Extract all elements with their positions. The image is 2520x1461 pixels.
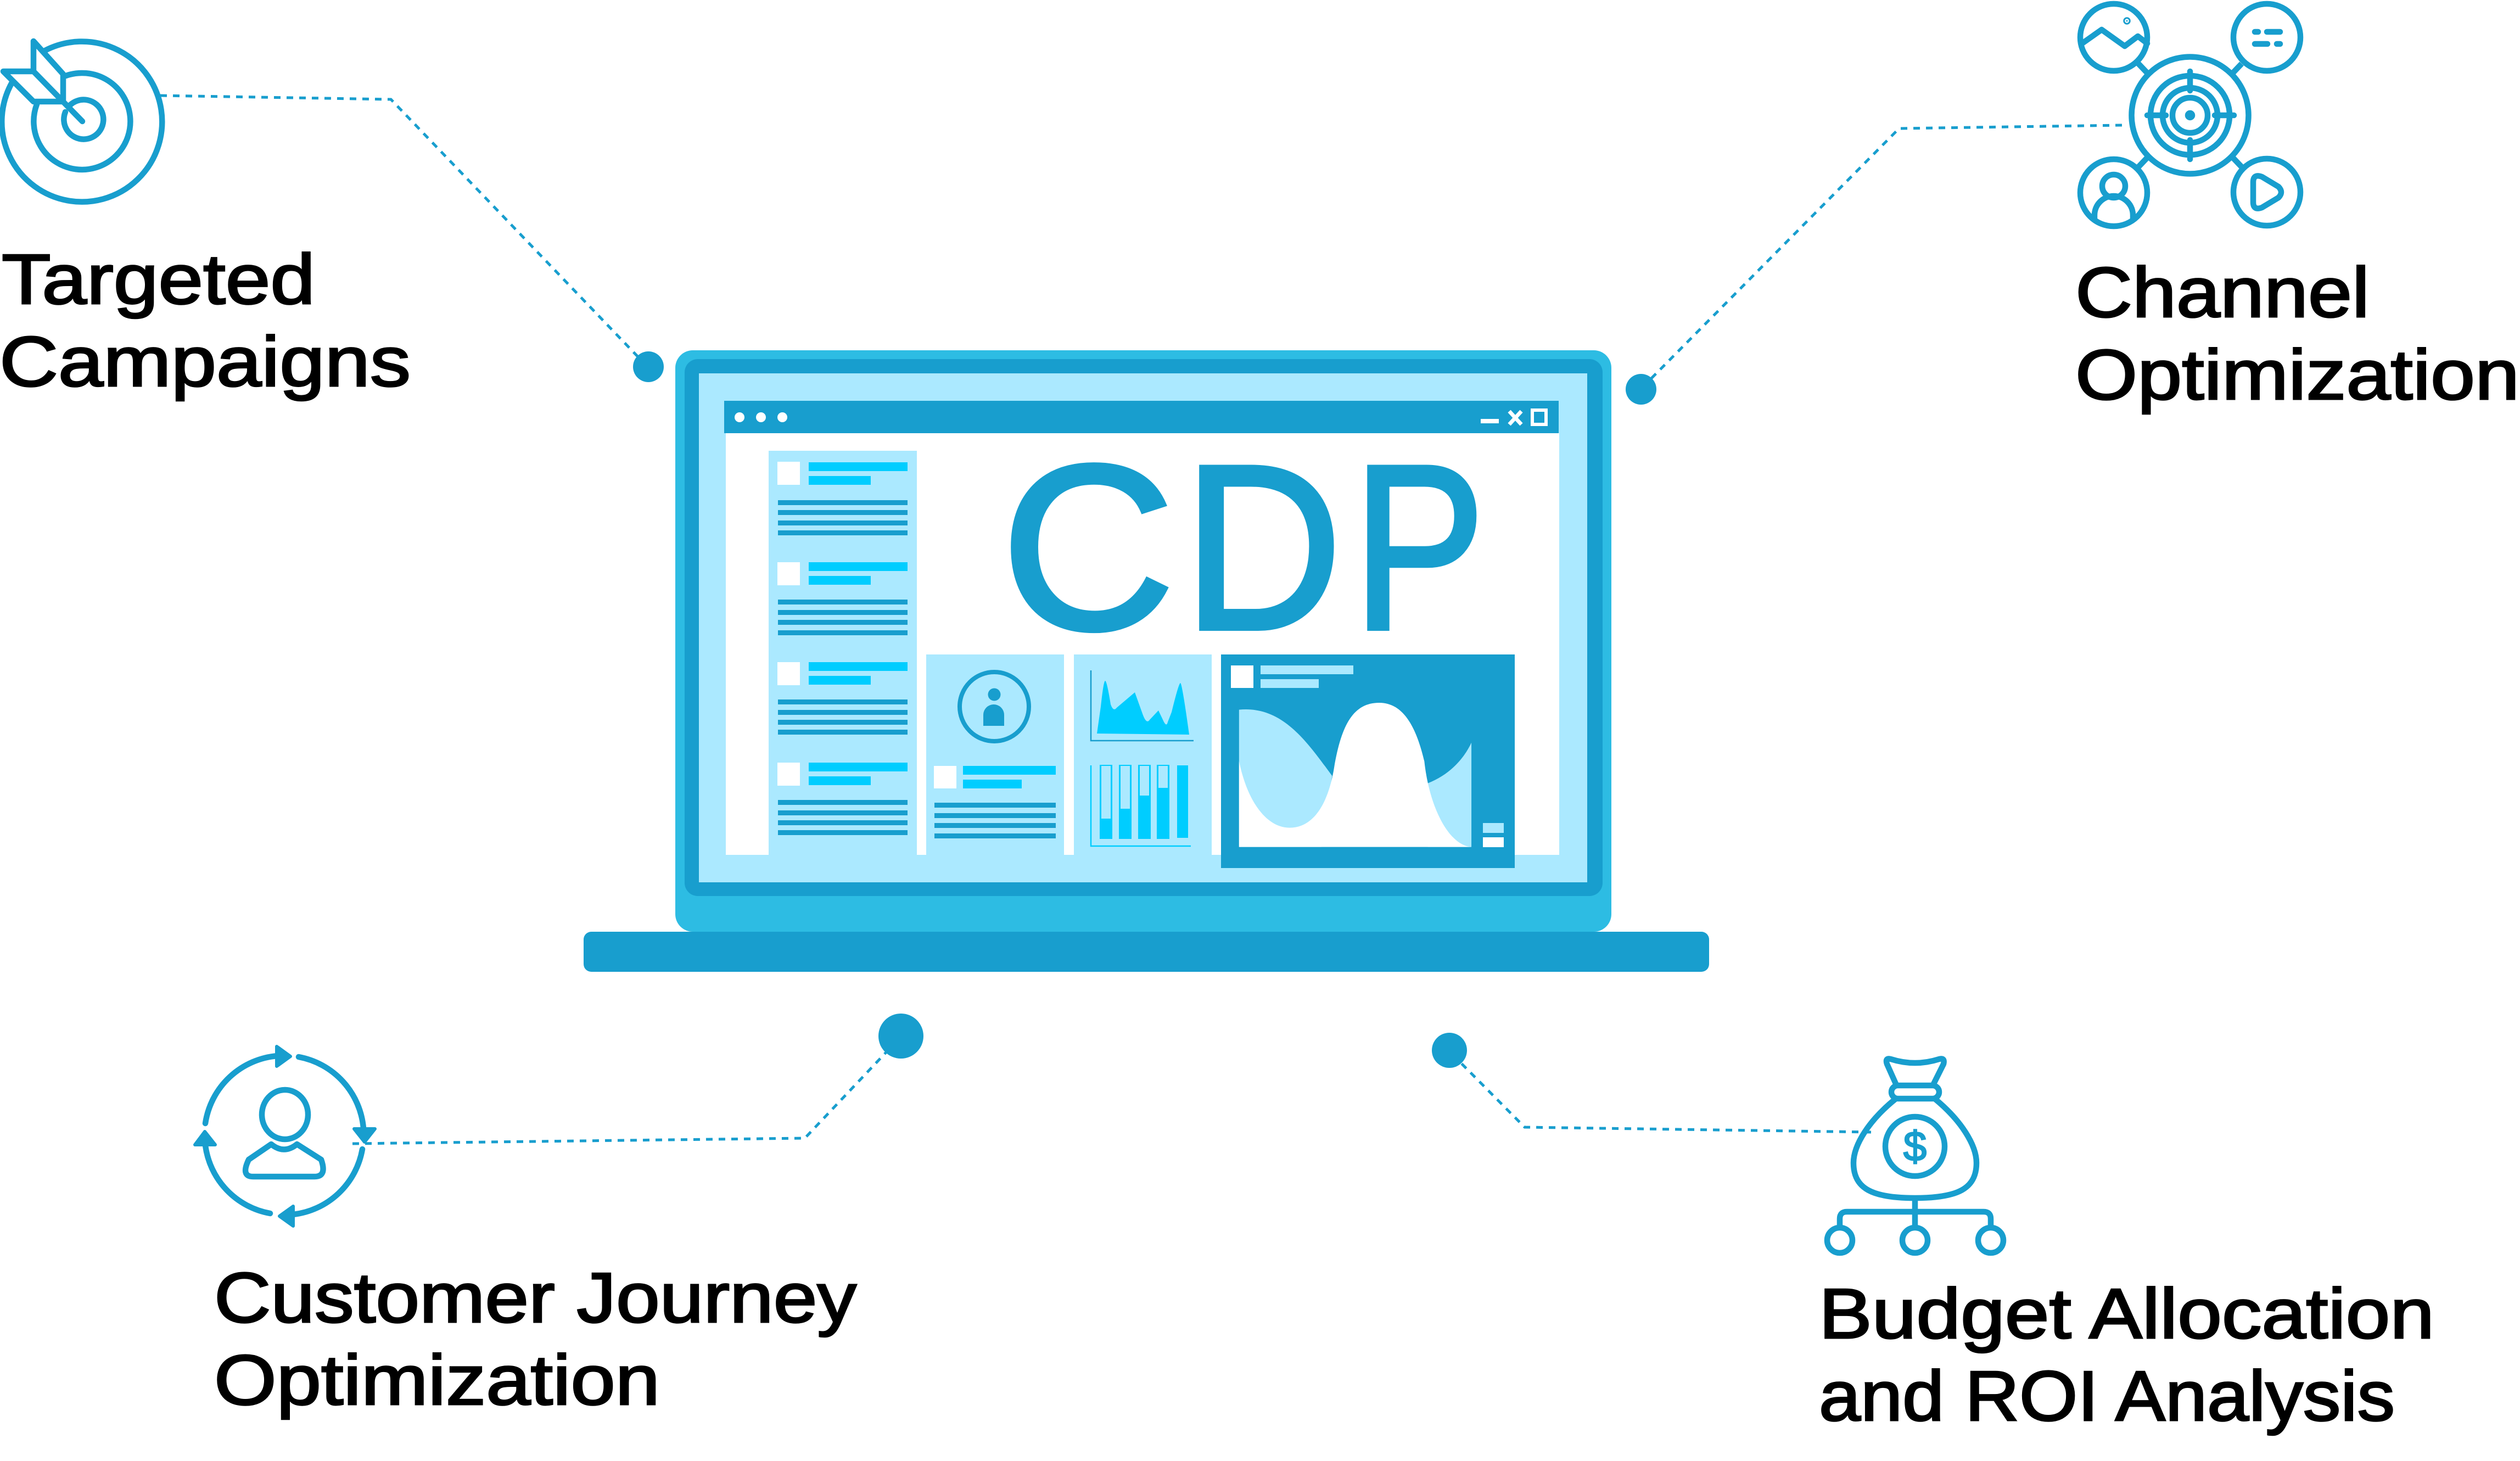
sidebar list column [769,451,917,857]
connector: customer journey to laptop [352,1014,923,1144]
icon: channel network [2080,4,2300,226]
icon: money bag with tree [1827,1059,2003,1253]
CDP heading: C [1001,416,1175,679]
area chart [1091,670,1194,741]
satellite: image [2080,4,2147,71]
connector: targeted campaigns to laptop [160,96,664,382]
label: Budget Allocation and ROI Analysis: Budget Allocation [1819,1274,2434,1353]
icon: customer journey cycle [195,1046,375,1226]
connector dot: top right [1626,374,1656,405]
label: Targeted Campaigns: Targeted [2,240,315,319]
laptop illustration [584,350,1709,972]
label: Budget Allocation and ROI Analysis: and ROI Analysis [1819,1357,2395,1436]
label: Customer Journey Optimization: Optimization [214,1341,660,1420]
window title bar [724,401,1559,433]
bar chart [1091,765,1191,846]
label: Customer Journey Optimization: Customer Journey [214,1258,857,1337]
laptop lid [675,350,1611,932]
connector: channel optimization to laptop [1626,125,2122,405]
curve chart [1239,703,1471,847]
charts card [1074,654,1212,857]
satellite: text [2233,4,2300,71]
CDP heading: D [1183,416,1342,679]
laptop screen [699,373,1587,882]
satellite: person [2080,159,2147,226]
label: Channel Optimization [2075,253,2519,415]
laptop bezel [685,359,1603,896]
CDP heading: P [1353,416,1485,679]
icon: target with arrow [2,41,162,202]
profile card [926,654,1064,857]
label: Targeted Campaigns [0,240,411,401]
connector: budget allocation to laptop [1432,1033,1871,1132]
label: Budget Allocation and ROI Analysis [1819,1274,2434,1436]
connector dot: bottom right [1432,1033,1467,1068]
label: Targeted Campaigns: Campaigns [0,322,411,401]
label: Channel Optimization: Optimization [2075,335,2519,415]
label: Customer Journey Optimization [214,1258,857,1420]
laptop base [584,932,1709,972]
connector dot: bottom left [878,1014,923,1059]
dollar sign: $ [1903,1123,1927,1170]
satellite: play [2233,159,2300,226]
app window background [726,433,1559,855]
main chart panel [1221,654,1515,868]
connector dot: top left [633,351,664,382]
label: Channel Optimization: Channel [2075,253,2370,332]
